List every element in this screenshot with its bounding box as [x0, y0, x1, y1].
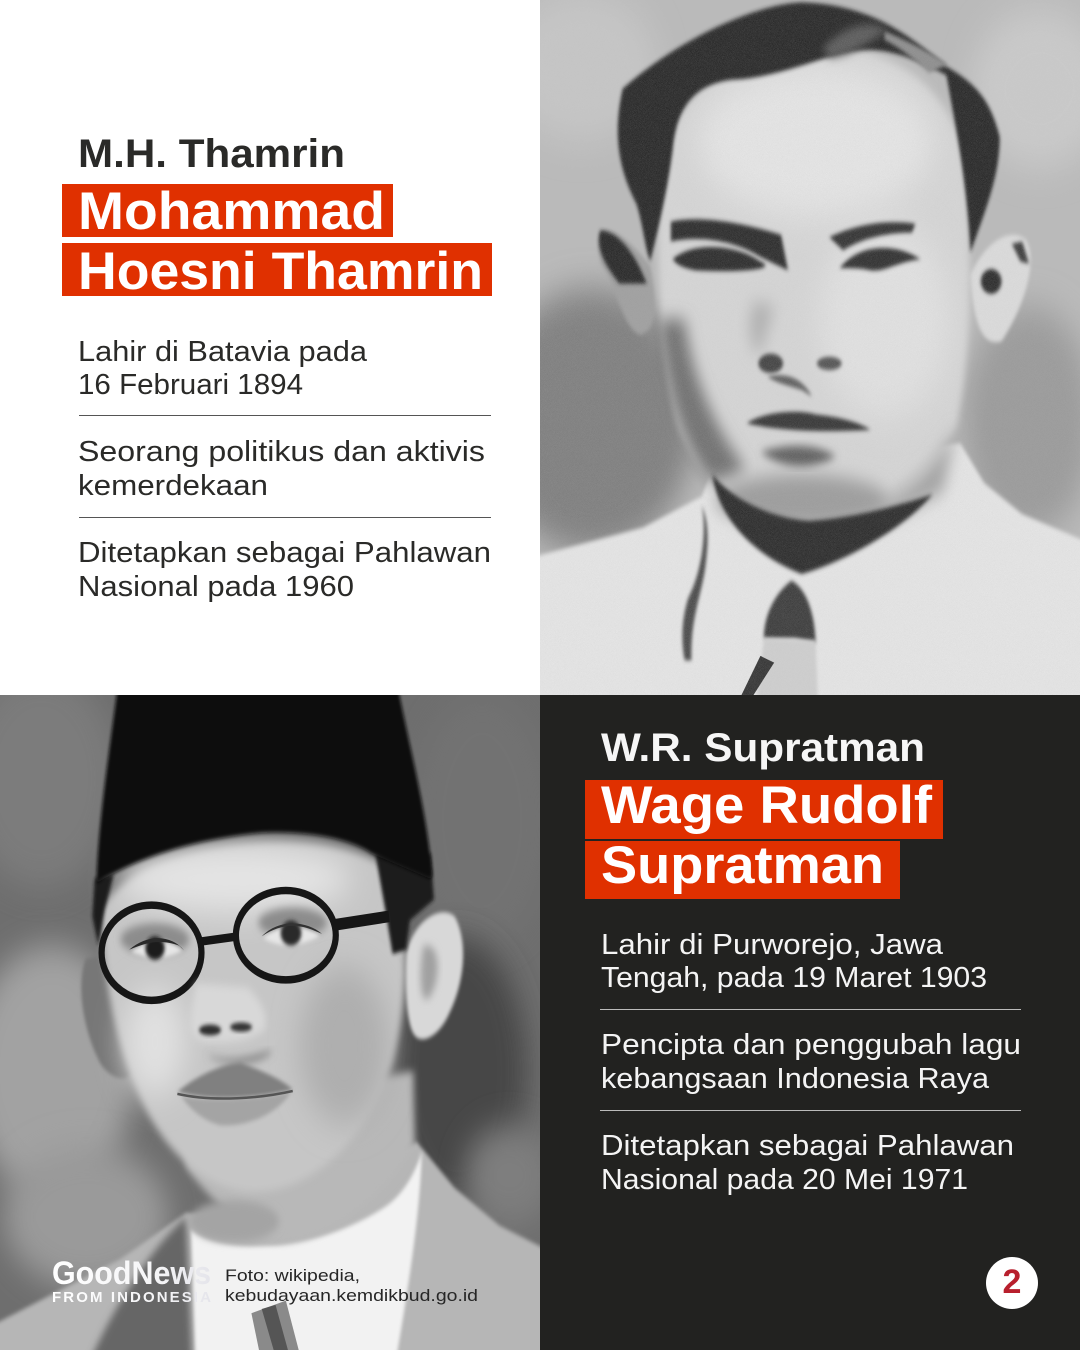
page number badge — [986, 1257, 1038, 1309]
logo: GoodNews from Indonesia — [52, 1255, 211, 1306]
face — [658, 44, 970, 527]
collar line — [682, 505, 708, 660]
mouth — [177, 1063, 293, 1098]
heading: short name: M.H. Thamrin — [78, 132, 345, 176]
fact: role — [601, 1029, 1021, 1095]
panel: Supratman biography — [585, 726, 1021, 1196]
fact: birth — [78, 336, 368, 401]
heading: short name: W.R. Supratman — [601, 726, 925, 770]
fact: role: kemerdekaan — [78, 470, 268, 502]
fact: national hero — [601, 1130, 1014, 1196]
logo: GoodNews from Indonesia: FROM INDONESIA — [52, 1289, 211, 1306]
photo credit: kebudayaan.kemdikbud.go.id — [225, 1286, 478, 1305]
highlight: Supratman: Supratman — [601, 836, 884, 895]
nose — [191, 983, 266, 1043]
tie — [764, 581, 816, 643]
panel: dark background — [540, 695, 1080, 1350]
neck — [186, 1071, 415, 1242]
eyes — [131, 941, 183, 958]
peci hat — [96, 678, 432, 883]
fact: national hero: Ditetapkan sebagai Pahlawan — [601, 1130, 1014, 1162]
shirt — [540, 442, 1080, 695]
fact: national hero: Nasional pada 1960 — [78, 571, 354, 603]
fact: birth: Lahir di Batavia pada — [78, 336, 368, 368]
highlight: Mohammad: Mohammad — [78, 182, 385, 241]
right ear — [970, 235, 1031, 342]
panel: Thamrin biography — [62, 132, 492, 603]
fact: role: kebangsaan Indonesia Raya — [601, 1063, 990, 1095]
fact: birth — [601, 929, 987, 994]
photo: W.R. Supratman portrait — [0, 670, 565, 1350]
fact: role: Pencipta dan penggubah lagu — [601, 1029, 1021, 1061]
logo: GoodNews from Indonesia: GoodNews — [52, 1255, 211, 1291]
neck shadow — [712, 474, 933, 574]
fact: national hero: Ditetapkan sebagai Pahlawan — [78, 537, 491, 569]
jaw shadow — [659, 319, 747, 483]
photo credit — [225, 1266, 478, 1305]
eye sockets — [121, 923, 189, 955]
fact: birth: Lahir di Purworejo, Jawa — [601, 929, 944, 961]
hair — [618, 2, 1000, 261]
fact: national hero: Nasional pada 20 Mei 1971 — [601, 1164, 968, 1196]
fact: role — [78, 436, 485, 502]
highlight: Wage Rudolf: Wage Rudolf — [601, 776, 932, 835]
tie — [252, 1300, 299, 1350]
hair side — [375, 854, 434, 954]
left ear — [80, 958, 129, 1080]
fact: birth: 16 Februari 1894 — [78, 369, 303, 401]
photo credit: Foto: wikipedia, — [225, 1266, 360, 1285]
left ear — [598, 230, 655, 335]
face — [100, 842, 405, 1192]
panel: white background — [0, 0, 540, 695]
photo: M.H. Thamrin portrait — [540, 0, 1080, 695]
fact: role: Seorang politikus dan aktivis — [78, 436, 485, 468]
mouth — [747, 412, 871, 431]
fact: birth: Tengah, pada 19 Maret 1903 — [601, 962, 987, 994]
white shirt — [191, 1150, 422, 1350]
page number badge: 2 — [1003, 1263, 1021, 1301]
suit — [0, 1142, 565, 1350]
fact: national hero — [78, 537, 491, 603]
brows and eyes — [671, 219, 788, 270]
highlight: Hoesni Thamrin: Hoesni Thamrin — [78, 242, 483, 301]
glasses — [102, 890, 389, 1000]
nose — [758, 354, 783, 373]
right ear — [406, 912, 463, 1039]
